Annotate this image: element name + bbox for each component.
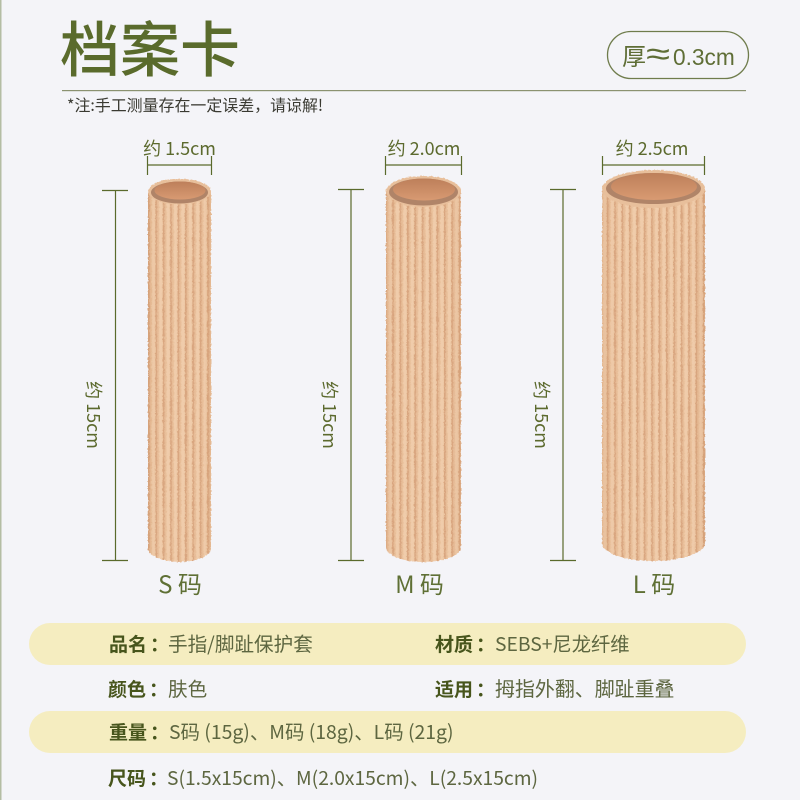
width dimension L	[602, 135, 704, 175]
thickness badge: 0.3cm	[673, 44, 735, 70]
info row 2	[108, 673, 674, 702]
height dimension M	[317, 190, 364, 560]
width dimension L: 约 2.5cm	[616, 135, 688, 161]
info row 2: 颜色：	[108, 675, 168, 702]
height dimension M: 约 15cm	[317, 381, 343, 449]
height dimension S: 约 15cm	[81, 381, 107, 449]
width dimension M	[386, 135, 462, 175]
height dimension L	[529, 190, 576, 560]
info row 3	[29, 711, 746, 753]
width dimension S	[143, 135, 216, 175]
width dimension S: 约 1.5cm	[143, 135, 216, 161]
label L: L 码	[633, 565, 675, 600]
title: 档案卡	[60, 2, 240, 90]
info row 2: 适用：	[435, 675, 495, 702]
tube S	[148, 179, 211, 562]
label S: S 码	[158, 565, 202, 600]
size S tube	[81, 135, 216, 600]
info row 2: 肤色	[168, 673, 207, 702]
label M: M 码	[395, 565, 444, 600]
width dimension M: 约 2.0cm	[388, 135, 460, 161]
info row 1: 手指/脚趾保护套	[168, 628, 313, 657]
thickness badge: 厚	[622, 37, 646, 72]
info row 1: 品名：	[109, 630, 169, 657]
note text: *注:手工测量存在一定误差，请谅解!	[67, 92, 323, 116]
info row 4: 尺码：	[108, 764, 168, 791]
info row 1: 材质：	[435, 630, 495, 657]
height dimension L: 约 15cm	[529, 381, 555, 449]
tube M	[386, 176, 461, 562]
info row 1	[29, 623, 746, 665]
size M tube	[317, 135, 462, 600]
tube L	[602, 170, 705, 561]
info row 1: SEBS+尼龙纤维	[495, 629, 630, 657]
info row 3: S码 (15g)、M码 (18g)、L码 (21g)	[169, 716, 454, 745]
size L tube	[529, 135, 705, 600]
info row 3: 重量：	[109, 718, 169, 745]
thickness badge: ≈	[646, 35, 670, 72]
info row 2: 拇指外翻、脚趾重叠	[495, 673, 674, 702]
info row 4: S(1.5x15cm)、M(2.0x15cm)、L(2.5x15cm)	[167, 763, 538, 791]
thickness badge	[608, 32, 748, 78]
height dimension S	[81, 190, 128, 560]
